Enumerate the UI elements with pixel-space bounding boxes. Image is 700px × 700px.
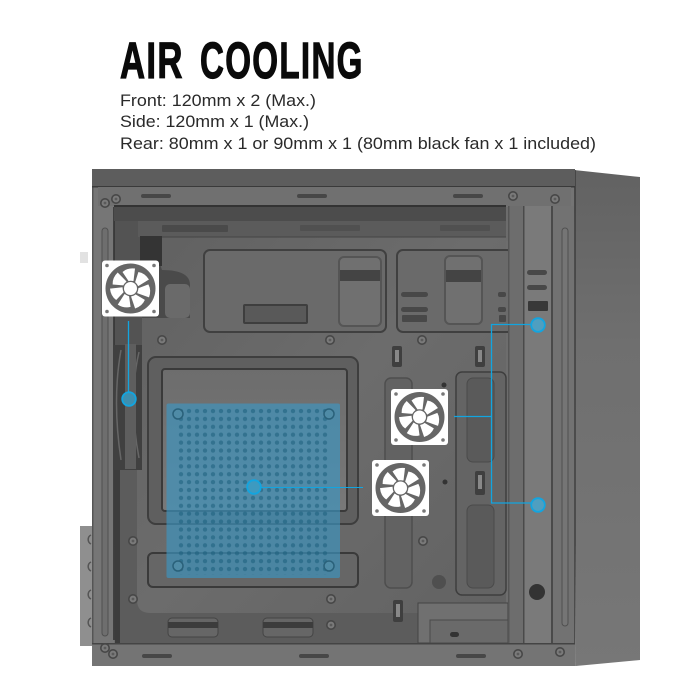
right rail strip (508, 206, 574, 644)
bottom slots (168, 618, 313, 637)
text block: fan specifications: Rear: 80mm x 1 or 90mm x 1 (80mm black fan x 1 included) (120, 135, 596, 153)
icon: side fan (372, 460, 429, 516)
right frame cutouts (385, 372, 506, 595)
text block: fan specifications: Front: 120mm x 2 (Max.) (120, 92, 316, 110)
marker: rear fan (122, 392, 136, 406)
title (120, 33, 364, 90)
interior tray background (114, 207, 508, 643)
title: COOLING (200, 33, 364, 90)
CPU cutout frame (148, 357, 358, 587)
icon: rear fan (102, 260, 159, 316)
bottom PSU area (418, 603, 508, 643)
upper drive bay plate (204, 250, 513, 332)
text block: fan specifications: Side: 120mm x 1 (Max.) (120, 113, 309, 131)
upper rail (98, 187, 571, 208)
tray right band (506, 240, 518, 607)
left rear bracket (80, 252, 93, 646)
arrow: side fan connector line (261, 486, 363, 488)
left bracket recess (140, 236, 190, 318)
top upper bay (114, 206, 506, 237)
left rail (92, 187, 142, 666)
arrow: front fan connector lines (454, 324, 531, 503)
perforated dots (178, 409, 327, 575)
text block: fan specifications (120, 92, 596, 153)
title: AIR (120, 34, 184, 90)
marker: side fan (247, 480, 261, 494)
top rail (92, 169, 575, 187)
panel: blue side fan area (166, 404, 340, 578)
tray lower band (120, 470, 508, 643)
marker: front fan top (531, 318, 545, 332)
vents (401, 292, 506, 322)
side panel edge (574, 170, 640, 666)
bottom rail (92, 643, 575, 666)
case body (92, 169, 575, 666)
screws on tray (128, 335, 428, 630)
rear fan in case (114, 344, 142, 470)
marker: front fan bottom (531, 498, 545, 512)
icon: front fan (391, 389, 448, 445)
small clips (392, 346, 485, 622)
panel: computer case interior (80, 169, 640, 666)
arrow: rear fan connector line (128, 321, 130, 392)
